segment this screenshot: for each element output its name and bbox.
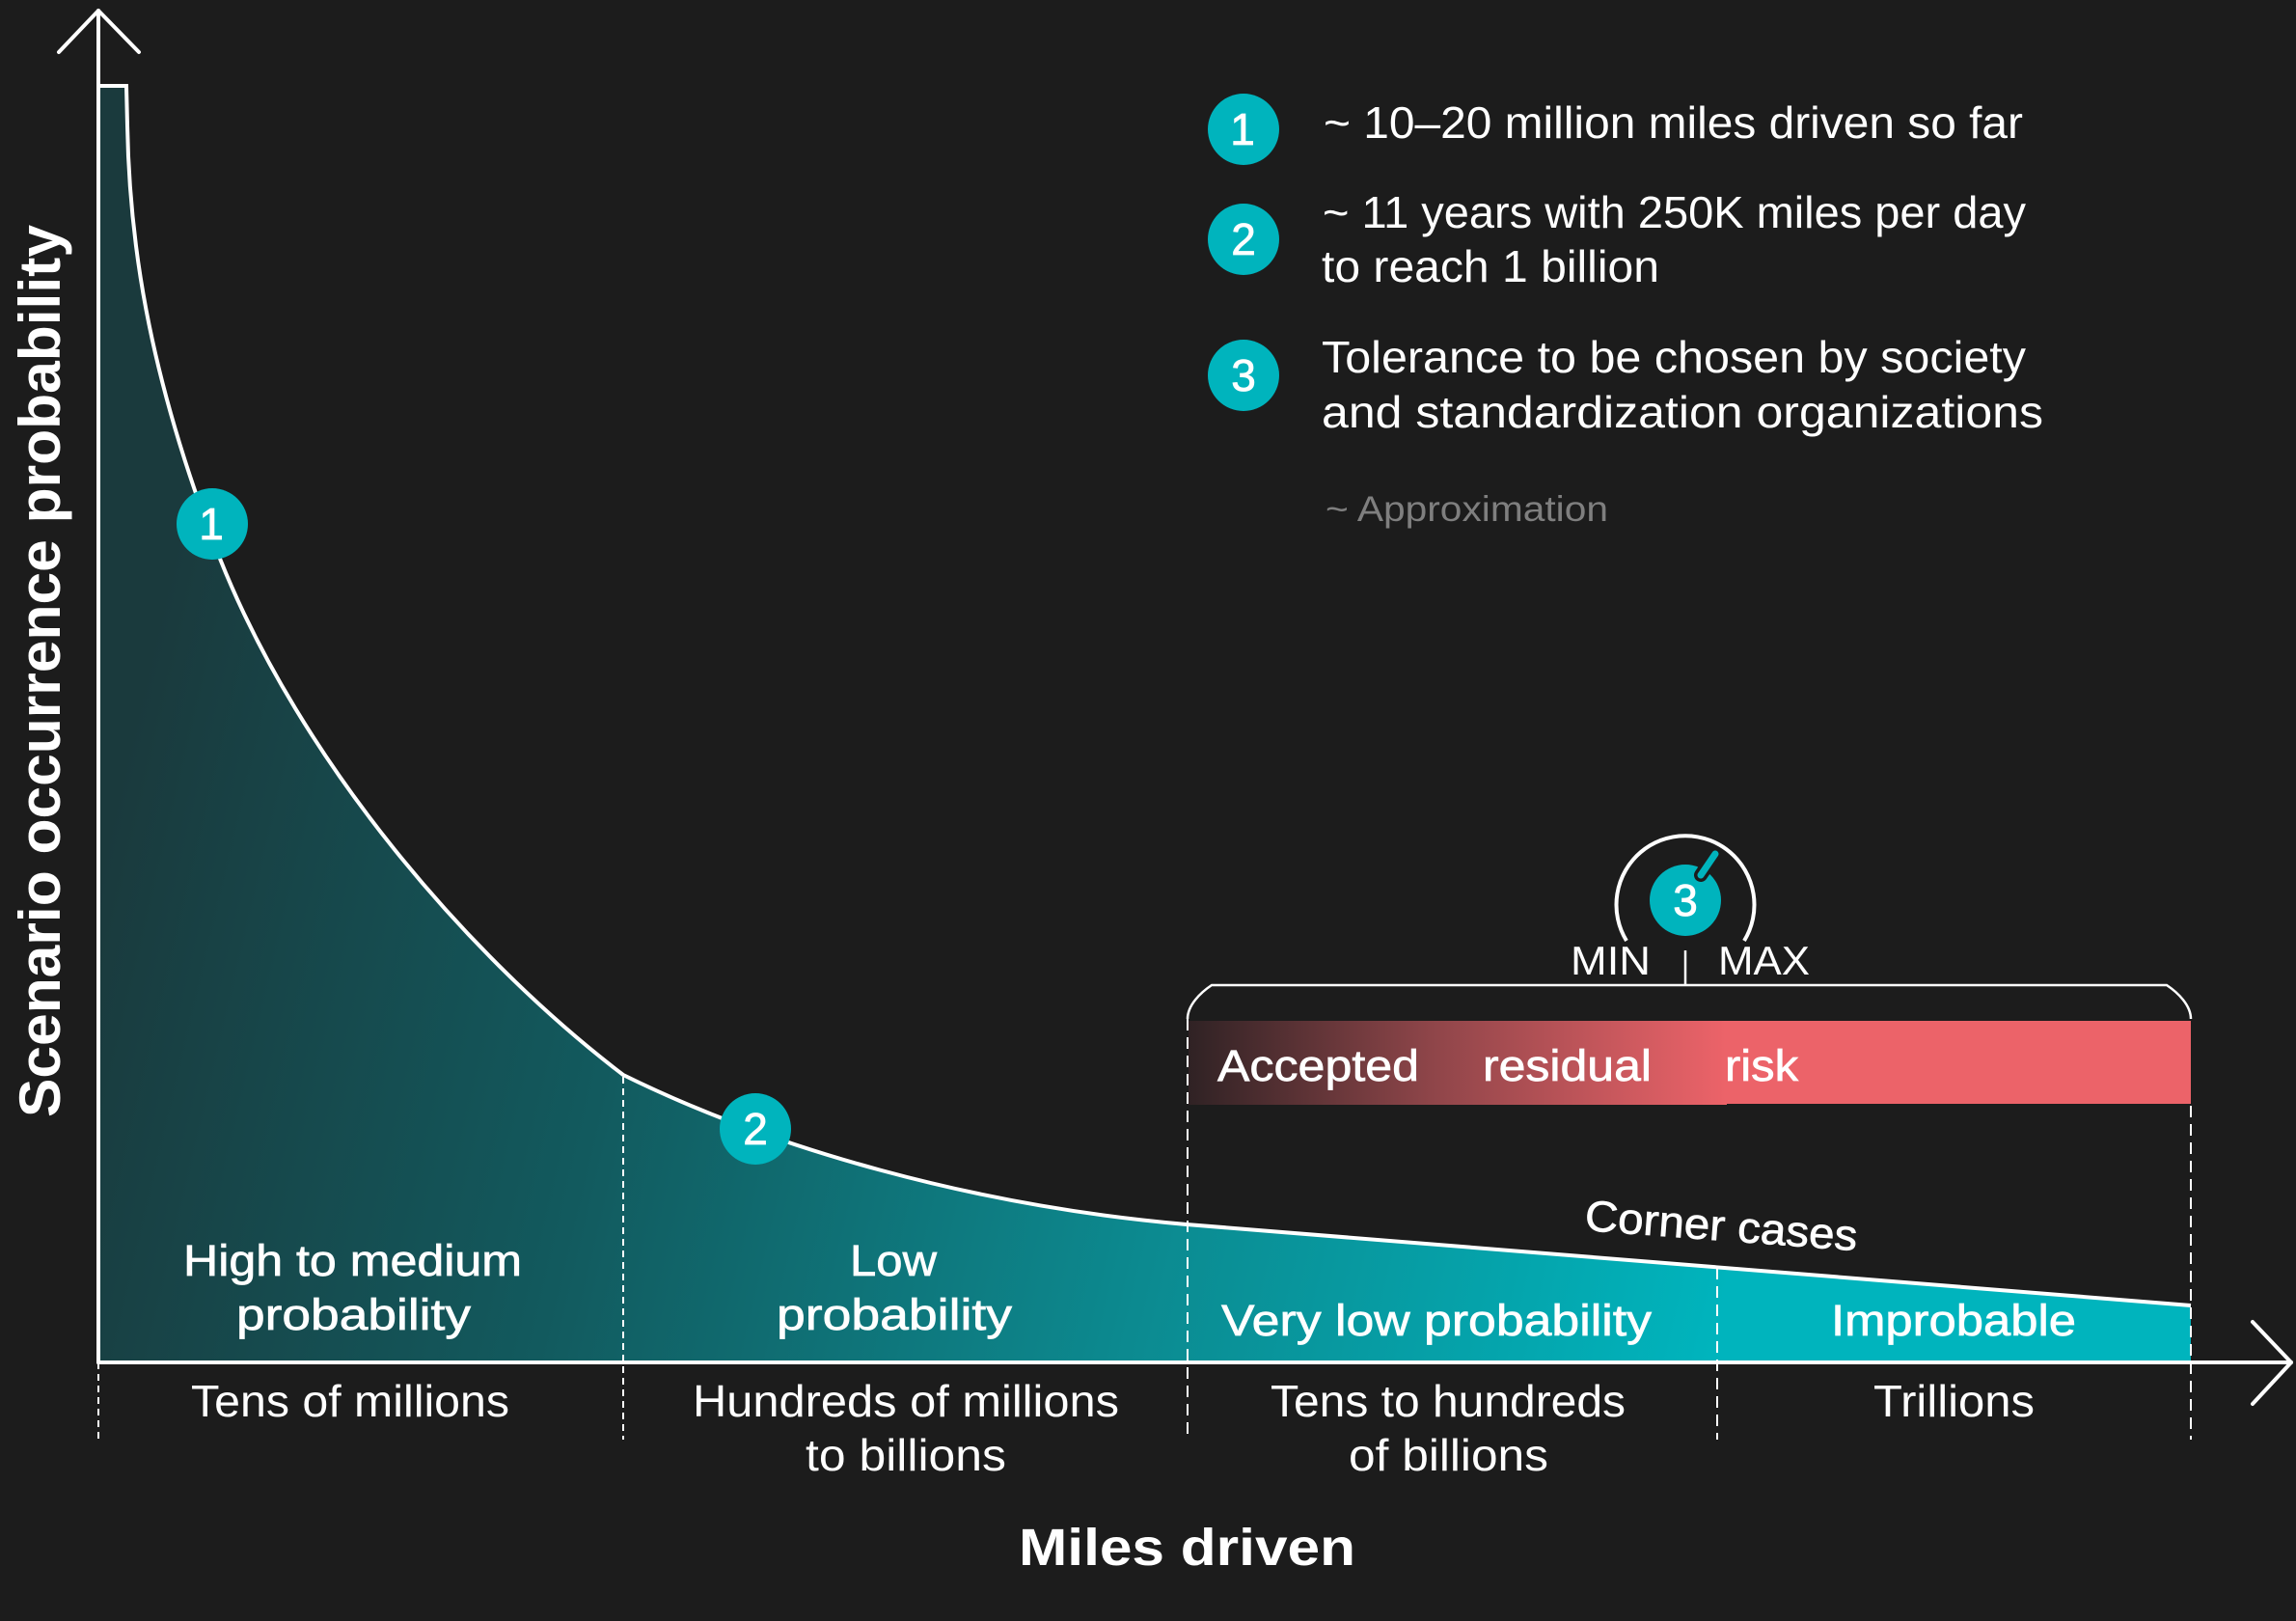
tick label: hundreds of millions to billions: to billions [806, 1430, 1006, 1480]
y axis title: Scenario occurrence probability [8, 224, 72, 1117]
region label: very low probability: Very low probability [1221, 1296, 1653, 1345]
region label: low probability [777, 1236, 1013, 1339]
MIN label: MIN [1571, 938, 1651, 983]
accepted residual risk bar [1189, 1021, 2191, 1105]
tick label: hundreds of millions to billions [693, 1376, 1119, 1480]
approximation note: ~ Approximation [1326, 489, 1608, 529]
region label: high to medium probability: probability [236, 1290, 472, 1339]
MAX label: MAX [1718, 938, 1810, 983]
badge 1 on curve: 1 [199, 499, 224, 549]
accepted residual risk bar: Accepted [1217, 1041, 1419, 1090]
legend item 3 [1208, 332, 2043, 437]
legend item 2: to reach 1 billion [1322, 241, 1659, 291]
y axis arrow [59, 11, 139, 1362]
region label: improbable: Improbable [1831, 1296, 2076, 1345]
badge 2 on curve [720, 1093, 791, 1165]
tick label: trillions: Trillions [1873, 1376, 2035, 1426]
legend item 3: and standardization organizations [1322, 387, 2043, 437]
region label: high to medium probability [183, 1236, 522, 1339]
tick label: tens to hundreds of billions: Tens to hundreds [1271, 1376, 1626, 1426]
legend item 2: ~ 11 years with 250K miles per day [1323, 187, 2026, 237]
probability curve line [98, 86, 2191, 1305]
accepted residual risk bar: risk [1725, 1041, 1799, 1090]
dial arc [1617, 836, 1754, 941]
region label: low probability: probability [777, 1290, 1013, 1339]
region label: high to medium probability: High to medium [183, 1236, 522, 1285]
accepted residual risk bar: residual [1483, 1041, 1652, 1090]
legend item 1 [1208, 94, 2023, 165]
tolerance dial: 3 [1673, 875, 1698, 925]
bracket spanning accepted residual risk [1188, 950, 2191, 1019]
tick label: tens to hundreds of billions: of billions [1349, 1430, 1548, 1480]
tolerance dial [1571, 836, 1810, 983]
tick label: tens of millions: Tens of millions [191, 1376, 509, 1426]
x axis arrow [98, 1322, 2291, 1404]
region label: low probability: Low [850, 1236, 938, 1285]
area under probability curve [98, 86, 2191, 1362]
legend [1208, 94, 2043, 529]
legend item 1: ~ 10–20 million miles driven so far [1324, 97, 2023, 148]
legend item 1: 1 [1230, 104, 1255, 154]
tick label: hundreds of millions to billions: Hundreds of millions [693, 1376, 1119, 1426]
legend item 3: Tolerance to be chosen by society [1322, 332, 2026, 382]
x axis title: Miles driven [1019, 1519, 1355, 1577]
dial needle [1701, 854, 1715, 875]
legend item 3: 3 [1231, 350, 1256, 400]
dial badge 3 [1650, 865, 1721, 936]
corner cases label: Corner cases [1583, 1191, 1859, 1260]
badge 1 on curve [177, 488, 248, 560]
legend item 2 [1208, 187, 2026, 291]
legend item 2: 2 [1231, 214, 1256, 264]
tick label: tens to hundreds of billions [1271, 1376, 1626, 1480]
badge 2 on curve: 2 [743, 1104, 768, 1154]
